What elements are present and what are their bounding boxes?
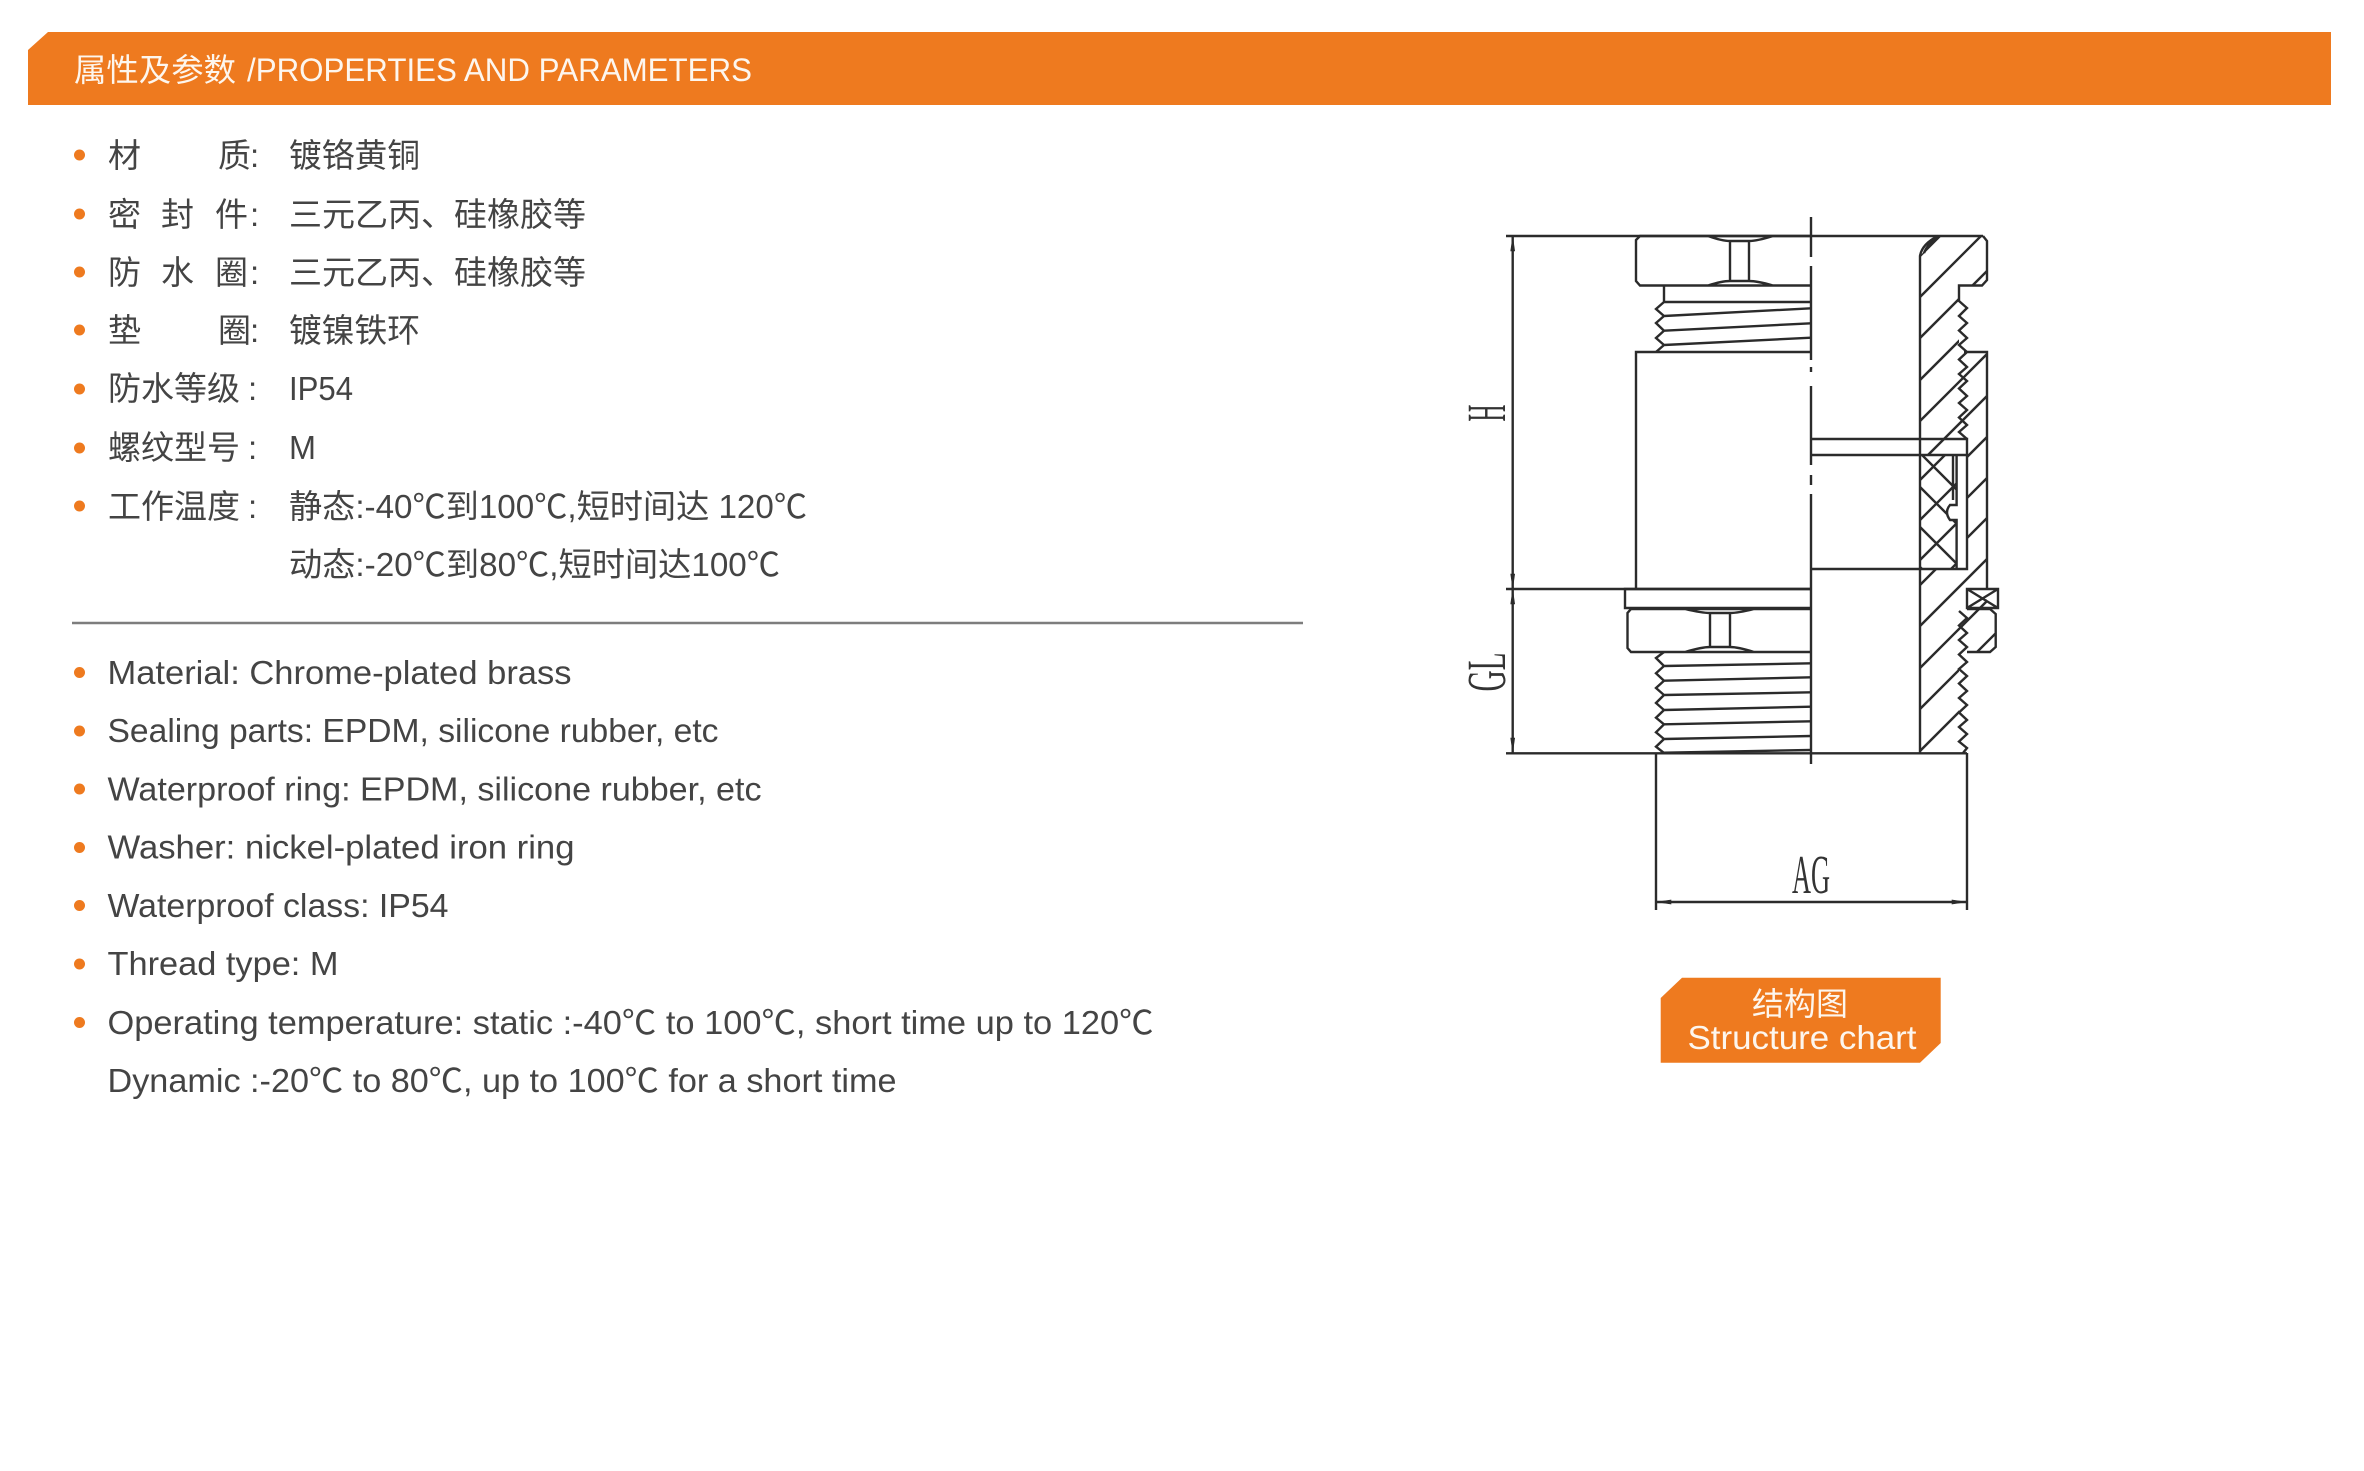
banner title: 属性及参数 [74,52,236,88]
structure drawing: AG [1792,844,1830,905]
banner background [28,32,2331,105]
dimension AG [1656,753,1967,910]
upper thread left half [1656,286,1811,352]
row: material: Material: Chrome-plated brass [108,654,572,691]
label text: Structure chart [1688,1019,1916,1056]
locking nut right [1967,609,1996,652]
banner title: /PROPERTIES AND PARAMETERS [247,52,752,88]
section hatching [1921,237,1994,752]
label background [1661,978,1941,1063]
row: working temperature: 动态:-20℃到80℃,短时间达100℃ [289,546,780,583]
row: material: 镀铬黄铜 [289,137,420,174]
row: sealing parts [74,196,586,233]
label text: 结构图 [1752,986,1848,1022]
English properties list [74,654,1154,1099]
row: washer: Washer: nickel-plated iron ring [108,828,574,866]
row: thread type: Thread type: M [108,945,338,982]
centre line [1810,217,1812,764]
row: thread type [74,429,316,466]
body left half [1636,352,1811,589]
row: thread type: M [289,429,316,466]
dimension label GL: GL [1456,652,1517,692]
right section outline [1920,236,1987,753]
header banner [28,32,2331,105]
structure drawing [1468,217,2000,910]
Chinese properties list [74,137,807,583]
o-ring cross section [1967,589,1998,608]
row: waterproof class: IP54 [289,370,353,407]
row: waterproof ring: Waterproof ring: EPDM, silicone rubber, etc [108,770,762,808]
row: working temperature: 工作温度: [108,488,257,525]
row: working temperature [74,488,807,583]
row: waterproof class [74,370,353,407]
seal cross hatching [1921,456,1956,568]
row: sealing parts: Sealing parts: EPDM, silicone rubber, etc [108,712,718,749]
compression ring and inner sleeve [1811,439,1967,569]
row: material: 材质: [108,137,259,174]
label text [1688,986,1916,1056]
row: washer: 镀镍铁环 [289,312,420,349]
row: washer [74,312,420,349]
row: sealing parts: 三元乙丙、硅橡胶等 [289,196,586,233]
row: thread type: 螺纹型号: [108,429,257,466]
row: waterproof class: Waterproof class: IP54 [108,887,448,924]
structure chart label [1661,978,1941,1063]
row: operating temperature [74,1004,1154,1099]
row: washer: 垫圈: [108,312,259,349]
row: waterproof class: 防水等级: [108,370,257,407]
row: sealing parts: 密封件: [108,196,259,233]
row: material [74,137,420,174]
dimension H and GL lines [1506,236,1983,753]
row: waterproof ring [74,254,586,291]
lower right thread [1959,611,1967,753]
row: operating temperature: Dynamic :-20℃ to 80℃, up to 100℃ for a short time [108,1062,896,1099]
row: working temperature: 静态:-40℃到100℃,短时间达 120℃ [289,488,807,525]
lower thread left half [1656,652,1811,753]
row: operating temperature: Operating temperature: static :-40℃ to 100℃, short time up to 120℃ [108,1004,1154,1041]
lower hex nut left half [1628,609,1811,652]
upper hex nut left half [1636,236,1811,286]
row: waterproof ring: 防水圈: [108,254,259,291]
row: waterproof ring: 三元乙丙、硅橡胶等 [289,254,586,291]
washer left half [1625,589,1811,608]
structure drawing: H [1456,404,1517,422]
